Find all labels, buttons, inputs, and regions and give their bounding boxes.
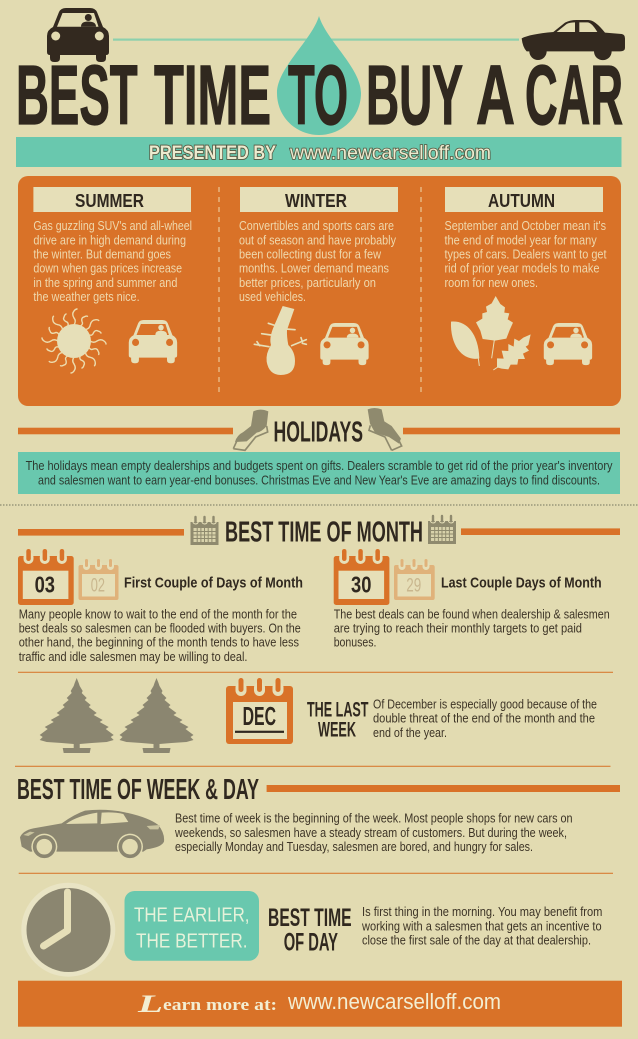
body text: working with a salesmen that gets an incentive to — [361, 919, 602, 933]
column: winter: used vehicles. — [239, 290, 306, 304]
connector line — [113, 38, 519, 41]
column: summer: Gas guzzling SUV's and all-wheel — [33, 219, 192, 233]
body text — [19, 607, 301, 664]
icon: grey calendar left — [190, 517, 218, 545]
callout: the earlier the better: THE BETTER. — [136, 929, 248, 952]
footer banner — [18, 981, 622, 1027]
heading: OF DAY — [284, 929, 338, 957]
best time of week text: especially Monday and Tuesday, salesmen are bored, and hungry for sales. — [175, 840, 533, 854]
icon: december calendar — [226, 678, 293, 744]
title: TO — [288, 48, 348, 142]
dashed dividers — [219, 187, 421, 392]
body text: traffic and idle salesmen may be willing to deal. — [19, 650, 248, 664]
section heading: holidays — [18, 408, 620, 450]
best time of day block — [268, 904, 602, 957]
column: winter — [239, 187, 398, 375]
icon: car — [320, 323, 369, 365]
best time of week text — [174, 812, 573, 854]
icon: leaves — [451, 296, 531, 370]
icon: side view car — [522, 20, 625, 60]
icon: calendar 03: 03 — [35, 572, 55, 598]
body text: are trying to reach their monthly targets to get paid — [334, 622, 582, 636]
body text: close the first sale of the day at that dealership. — [362, 934, 591, 948]
icon: calendar 29 — [394, 559, 435, 600]
icon: sedan silhouette — [20, 810, 164, 860]
body text: Many people know to wait to the end of the month for the — [19, 607, 297, 621]
header: title and car icons — [16, 8, 625, 142]
column: autumn — [444, 187, 607, 370]
section heading: best time of week and day: BEST TIME OF WEEK & DAY — [17, 774, 259, 806]
column: summer: SUMMER — [75, 191, 144, 211]
footer banner: www.newcarselloff.com — [287, 989, 501, 1014]
section heading: holidays: HOLIDAYS — [274, 417, 363, 449]
column: summer: the winter. But demand goes — [33, 247, 171, 261]
heading — [268, 904, 352, 957]
icon: calendar 29: 29 — [406, 576, 421, 597]
body text — [361, 905, 602, 948]
body text: end of the year. — [373, 726, 447, 740]
body text — [373, 697, 597, 740]
icon: water drop — [277, 16, 361, 135]
icon: right lounge chair — [368, 408, 402, 450]
body text: other hand, the beginning of the month tends to have less — [19, 636, 299, 650]
body text: double threat of the end of the month and the — [373, 712, 595, 726]
title: TIME — [154, 48, 271, 142]
title — [16, 48, 623, 142]
body text: best deals so salesmen can be flooded with buyers. On the — [19, 622, 301, 636]
column: autumn: rid of prior year models to make — [444, 262, 600, 276]
body text: Of December is especially good because of the — [373, 697, 597, 711]
subheading: Last Couple Days of Month — [441, 575, 602, 592]
heading: THE LAST — [307, 699, 369, 722]
section heading: best time of month — [18, 516, 620, 549]
body text — [334, 607, 610, 650]
column: winter: better prices, particularly on — [239, 276, 376, 290]
icon: christmas trees — [40, 678, 194, 753]
icon: sun — [42, 309, 106, 373]
last couple of days block — [334, 549, 610, 650]
title: BUY — [366, 48, 463, 142]
column: winter: WINTER — [285, 191, 347, 211]
column: winter: been collecting dust for a few — [239, 247, 382, 261]
title: A — [476, 48, 515, 142]
holidays text box — [18, 452, 620, 494]
section heading: best time of month: BEST TIME OF MONTH — [225, 517, 423, 549]
icon: left lounge chair — [233, 410, 268, 450]
icon: calendar 02 — [78, 559, 118, 600]
presented by banner: PRESENTED BY — [149, 142, 276, 164]
icon: snowman — [254, 306, 306, 375]
icon: clock — [21, 883, 115, 977]
subheading: First Couple of Days of Month — [124, 575, 303, 592]
presented by banner: www.newcarselloff.com — [289, 142, 491, 164]
panel: seasons — [18, 176, 621, 406]
the last week block — [307, 697, 597, 742]
heading — [307, 699, 369, 742]
icon: front view car — [47, 8, 109, 62]
best time of week text: Best time of week is the beginning of the week. Most people shops for new cars on — [175, 812, 573, 826]
column: autumn: September and October mean it's — [444, 219, 606, 233]
column: summer: in the spring and summer and — [33, 276, 177, 290]
icon: calendar 02: 02 — [91, 576, 105, 597]
icon: december calendar: DEC — [243, 701, 276, 731]
column: winter: out of season and have probably — [239, 233, 397, 247]
column: winter: months. Lower demand means — [239, 262, 389, 276]
column: autumn: the end of model year for many — [444, 233, 597, 247]
first couple of days block — [18, 549, 303, 664]
title: BEST — [16, 48, 138, 142]
icon: car — [544, 323, 592, 365]
callout: the earlier the better: THE EARLIER, — [134, 904, 250, 927]
presented by banner — [16, 137, 622, 167]
icon: calendar 30: 30 — [351, 572, 371, 598]
body text: bonuses. — [334, 636, 376, 650]
icon: calendar 03 — [18, 549, 74, 605]
column: autumn: room for new ones. — [444, 276, 538, 290]
icon: car — [129, 320, 177, 363]
callout: the earlier the better — [124, 891, 259, 961]
column: summer: down when gas prices increase — [33, 262, 182, 276]
section heading: best time of week and day — [17, 774, 620, 806]
footer banner: earn more at: — [163, 995, 277, 1014]
heading: BEST TIME — [268, 904, 352, 932]
column: autumn: types of cars. Dealers want to get — [444, 247, 607, 261]
icon: calendar 30 — [334, 549, 389, 605]
column: autumn: AUTUMN — [488, 191, 555, 211]
body text: Is first thing in the morning. You may benefit from — [362, 905, 602, 919]
column: summer: the weather gets nice. — [33, 290, 140, 304]
icon: grey calendar right — [428, 516, 456, 544]
footer banner: L — [136, 991, 163, 1018]
best time of week text: weekends, so salesmen have a steady stream of customers. But during the week, — [174, 826, 567, 840]
column: summer — [33, 187, 192, 373]
column: summer: drive are in high demand during — [33, 233, 186, 247]
column: winter: Convertibles and sports cars are — [239, 219, 394, 233]
heading: WEEK — [318, 719, 356, 742]
